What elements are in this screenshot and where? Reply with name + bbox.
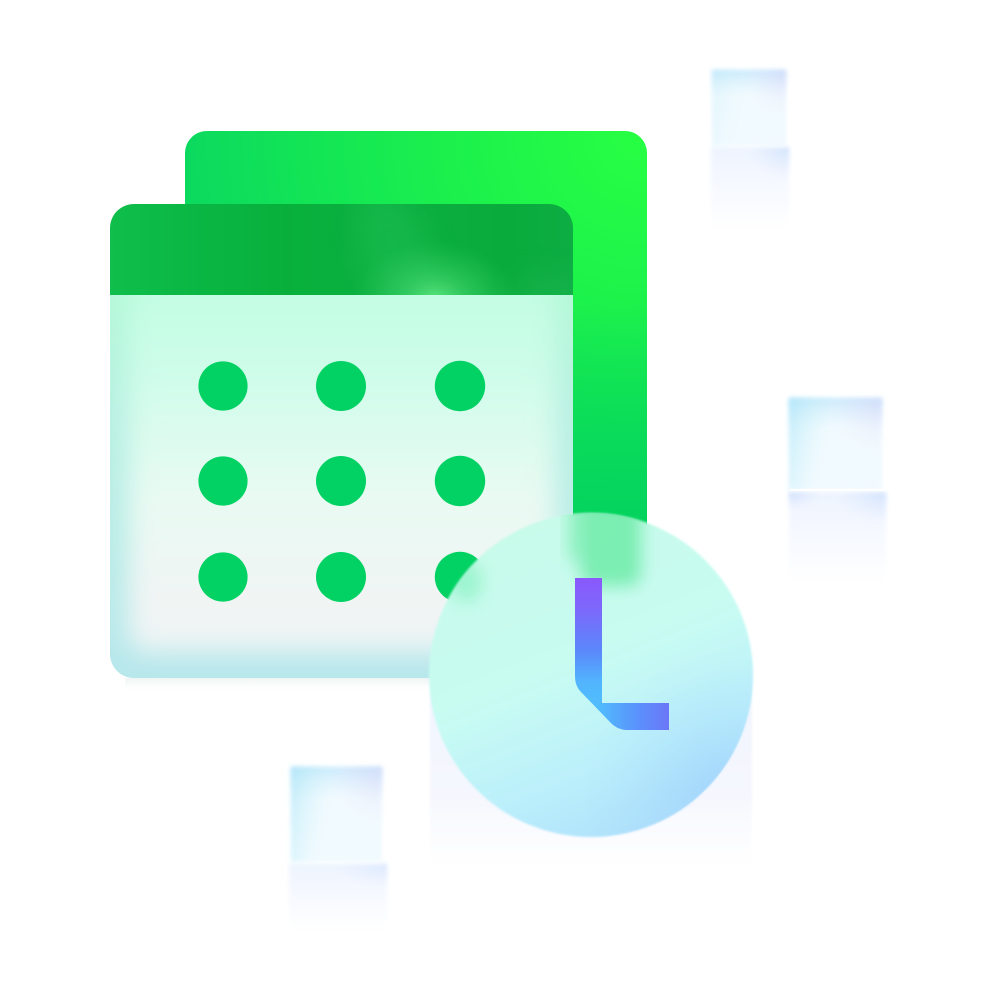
green blur from date dot [450, 562, 482, 602]
decorative square: right middle [789, 398, 886, 592]
calendar back sheet [185, 131, 647, 571]
clock shadow [430, 690, 752, 880]
decorative square: bottom [289, 767, 387, 936]
calendar shadow [125, 678, 435, 692]
clock face [428, 511, 754, 838]
illustration: calendar and clock icon [110, 67, 888, 898]
calendar date dots [198, 361, 485, 602]
calendar header band [110, 204, 573, 295]
clock hands [575, 578, 669, 730]
decorative square: top right [711, 70, 789, 237]
calendar front sheet [110, 177, 590, 678]
green blur from back sheet [581, 480, 641, 586]
calendar body [110, 270, 573, 678]
